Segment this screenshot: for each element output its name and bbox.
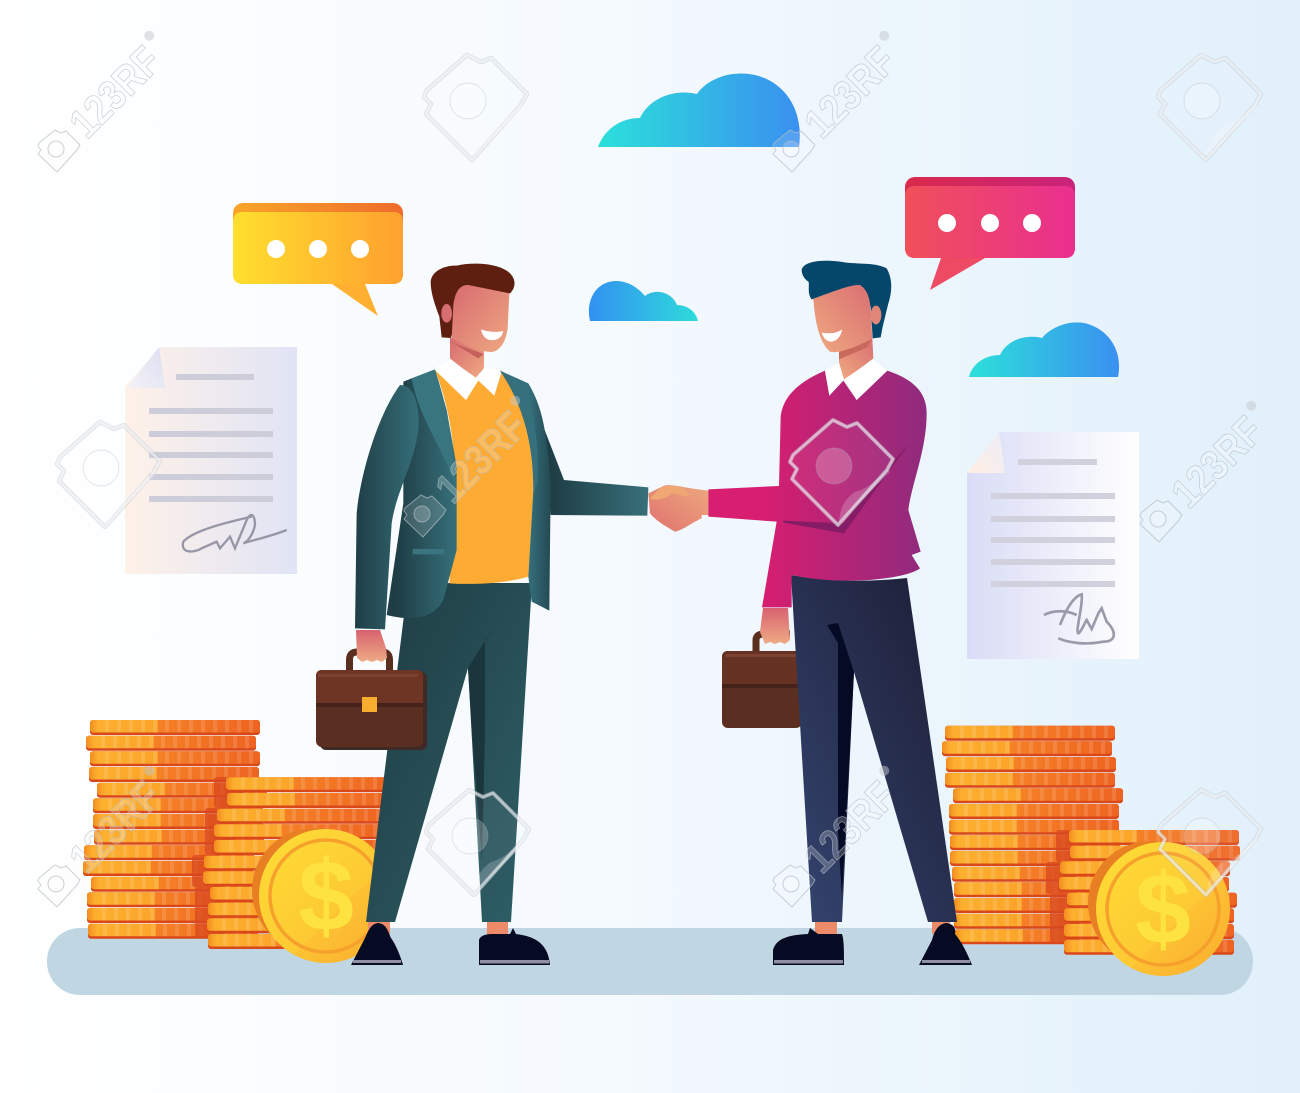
big coin: right: $	[1135, 853, 1191, 965]
collar: right man	[825, 359, 887, 400]
face: left man	[452, 285, 509, 352]
shoe: left man left foot	[351, 923, 403, 965]
lapel: left	[412, 369, 455, 483]
sweater: right man	[708, 371, 927, 607]
handshake	[648, 485, 708, 532]
trouser crease: right man	[827, 623, 854, 897]
smile: left man	[481, 329, 503, 340]
hand: left man lower	[356, 630, 387, 662]
coin stack shadow: right	[1046, 830, 1086, 944]
shoe: right man right foot	[919, 923, 972, 965]
jacket arm: right sleeve	[543, 427, 648, 516]
speech bubble: yellow	[233, 203, 403, 316]
hair: right man	[802, 261, 891, 338]
coin stack: right short	[1059, 830, 1240, 955]
lapel: right	[500, 371, 538, 491]
ground	[47, 928, 1253, 995]
sweater arm shadow	[783, 443, 909, 533]
pocket	[413, 549, 444, 554]
jacket: right panel	[500, 371, 551, 611]
thumb highlight	[650, 486, 689, 500]
coin stack: left tall	[83, 720, 267, 939]
ear: right man	[871, 306, 881, 324]
coin stack shadow: left	[192, 777, 244, 937]
ear: left man	[441, 304, 452, 323]
neck: left man	[450, 337, 484, 378]
big coin: right	[1088, 841, 1230, 976]
upper body: left man	[355, 264, 648, 629]
smile: right man	[822, 329, 842, 342]
cloud: right	[969, 322, 1119, 377]
coin stack: right tall	[942, 726, 1125, 944]
sweater: left man	[435, 370, 533, 584]
ankles: left man	[368, 922, 508, 936]
face: right man	[813, 285, 872, 352]
cloud: middle	[589, 281, 698, 321]
briefcase: right man	[722, 634, 802, 728]
shoe: left man right foot	[479, 928, 550, 965]
man: left	[351, 264, 648, 965]
shoe: right man left foot	[773, 928, 844, 965]
trousers: left man	[366, 583, 532, 922]
ankles: right man	[815, 922, 950, 936]
hair: left man	[431, 264, 514, 338]
hand: right man lower	[760, 608, 790, 644]
jacket: left panel	[387, 369, 457, 618]
document: left contract	[125, 347, 297, 574]
trouser crease: left man	[468, 625, 495, 860]
speech bubble: pink	[905, 177, 1075, 290]
cloud: top	[598, 74, 800, 147]
briefcase: left man	[316, 652, 427, 750]
man: right	[648, 261, 972, 965]
upper body: right man	[648, 261, 927, 607]
neck shadow	[839, 339, 872, 359]
sleeve: left	[355, 385, 419, 629]
big coin: left: $	[298, 840, 354, 952]
document: right contract	[967, 432, 1139, 659]
neck: right man	[839, 338, 873, 381]
trousers: right man	[791, 575, 957, 922]
coin stack: left short	[203, 777, 397, 949]
collar: left man	[434, 359, 498, 400]
big coin: left	[252, 828, 393, 963]
neck shadow	[452, 342, 484, 358]
